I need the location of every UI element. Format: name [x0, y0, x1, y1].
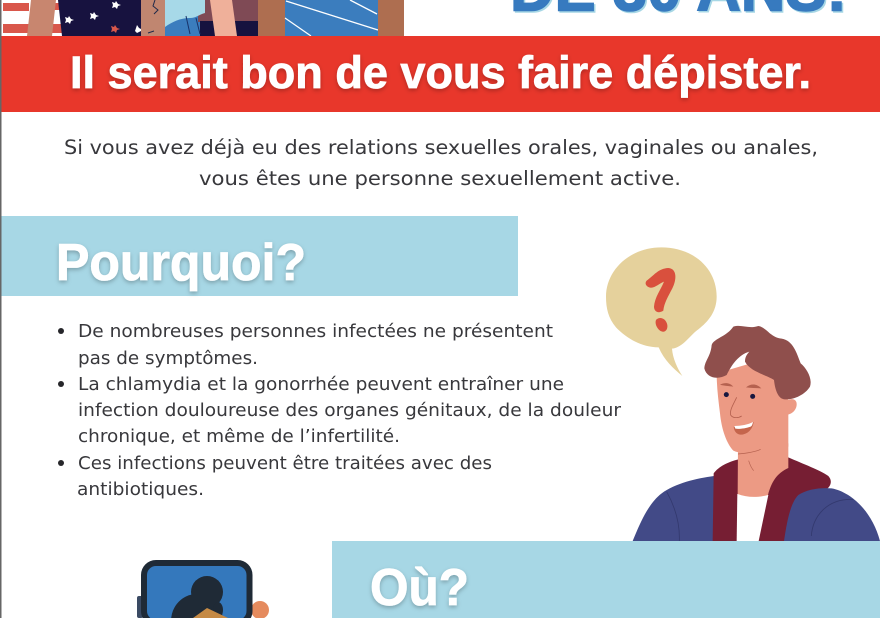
intro text: Si vous avez déjà eu des relations sexuelles orales, vaginales ou anales,: [64, 136, 818, 159]
red banner: [1, 36, 880, 112]
illustration: group of people (cropped): [3, 0, 404, 36]
bullet list: reasons: infection douloureuse des organes génitaux, de la douleur: [78, 401, 622, 421]
heading: Pourquoi?: Pourquoi?: [56, 234, 306, 292]
bullet list: reasons: Ces infections peuvent être traitées avec des: [78, 454, 492, 474]
panel: Pourquoi heading band: [1, 216, 518, 296]
bullet list: reasons: pas de symptômes.: [78, 349, 258, 369]
bullet list: reasons: De nombreuses personnes infectées ne présentent: [78, 322, 553, 342]
bullet list: reasons: antibiotiques.: [77, 480, 204, 500]
illustration: person on a smartphone (cropped): [137, 563, 269, 618]
illustration: smiling young man in hoodie: [633, 326, 880, 541]
panel: Où heading band: [332, 541, 880, 618]
icon: speech bubble with question mark: [606, 247, 717, 376]
bullet list: reasons: [58, 322, 622, 500]
heading: Où?: Où?: [370, 559, 469, 617]
bullet list: reasons: chronique, et même de l’infertilité.: [78, 427, 400, 447]
intro text: [64, 136, 818, 190]
banner heading: Il serait bon de vous faire dépister.: [70, 47, 811, 98]
intro text: vous êtes une personne sexuellement active.: [199, 167, 681, 190]
bullet list: reasons: La chlamydia et la gonorrhée peuvent entraîner une: [78, 375, 564, 395]
